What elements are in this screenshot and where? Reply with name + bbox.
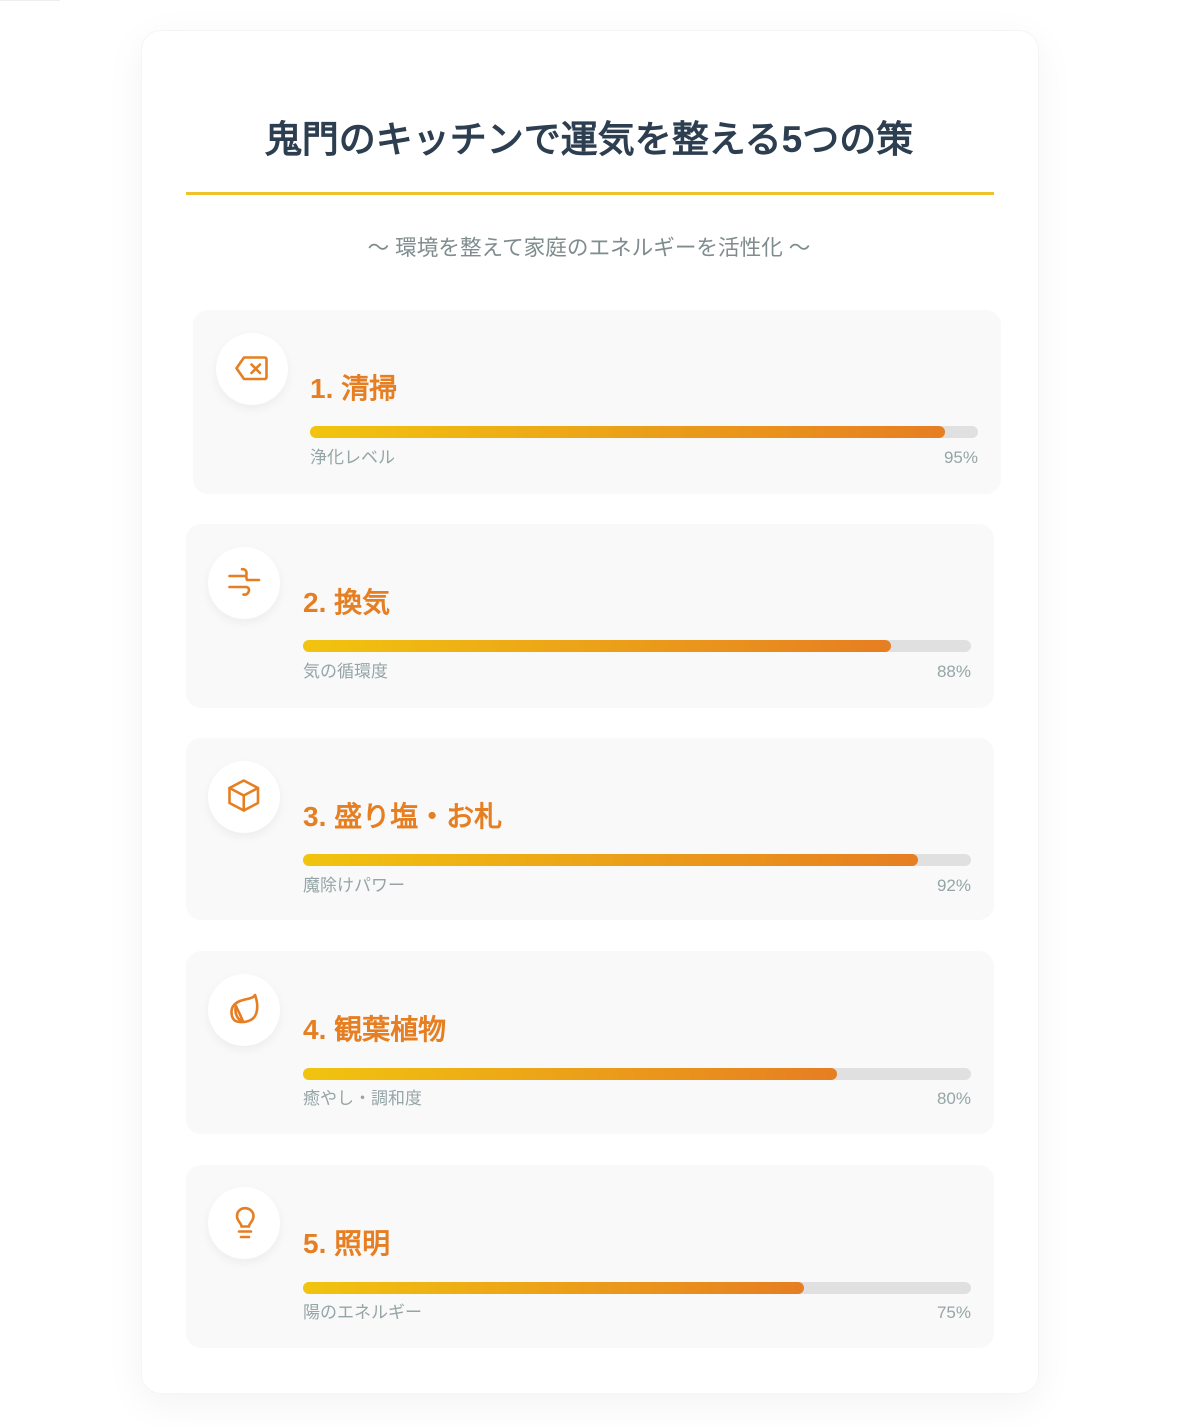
panel: 4 foliage plants xyxy=(186,951,994,1134)
panel: 3 salt and talisman xyxy=(186,738,994,920)
icon: leaf xyxy=(208,974,280,1046)
panel: 1 cleaning xyxy=(193,310,1001,494)
subtitle: ～ 環境を整えて家庭のエネルギーを活性化 ～ xyxy=(368,235,810,260)
icon: cube xyxy=(208,761,280,833)
value: 80%: 80% xyxy=(937,1089,971,1108)
label: yang energy: 陽のエネルギー xyxy=(303,1303,422,1322)
value: 75%: 75% xyxy=(937,1303,971,1322)
progress bar: 75% xyxy=(303,1282,971,1294)
icon: wind xyxy=(208,547,280,619)
label: healing and harmony: 癒やし・調和度 xyxy=(303,1084,422,1109)
panel: 5 lighting xyxy=(186,1165,994,1348)
title underline xyxy=(186,192,994,195)
panel: 2 ventilation xyxy=(186,524,994,708)
heading: 2: 2. 換気 xyxy=(303,587,390,618)
heading: 4: 4. 観葉植物 xyxy=(303,1014,446,1045)
progress bar: 80% xyxy=(303,1068,971,1080)
title: 鬼門のキッチンで運気を整える5つの策 xyxy=(265,119,913,160)
value: 88%: 88% xyxy=(937,662,971,681)
icon: light bulb xyxy=(208,1187,280,1259)
label: warding power: 魔除けパワー xyxy=(303,876,405,895)
label: purification level: 浄化レベル xyxy=(310,448,395,467)
icon: eraser backspace xyxy=(216,333,288,405)
heading: 5: 5. 照明 xyxy=(303,1228,390,1259)
heading: 1: 1. 清掃 xyxy=(310,373,397,404)
decorative top-left edge mark xyxy=(0,0,60,1)
progress bar: 95% xyxy=(310,426,978,438)
value: 92%: 92% xyxy=(937,876,971,895)
label: air circulation: 気の循環度 xyxy=(303,662,388,681)
value: 95%: 95% xyxy=(944,448,978,467)
heading: 3: 3. 盛り塩・お札 xyxy=(303,795,502,835)
progress bar: 92% xyxy=(303,854,971,866)
progress bar: 88% xyxy=(303,640,971,652)
main panel xyxy=(141,30,1039,1394)
